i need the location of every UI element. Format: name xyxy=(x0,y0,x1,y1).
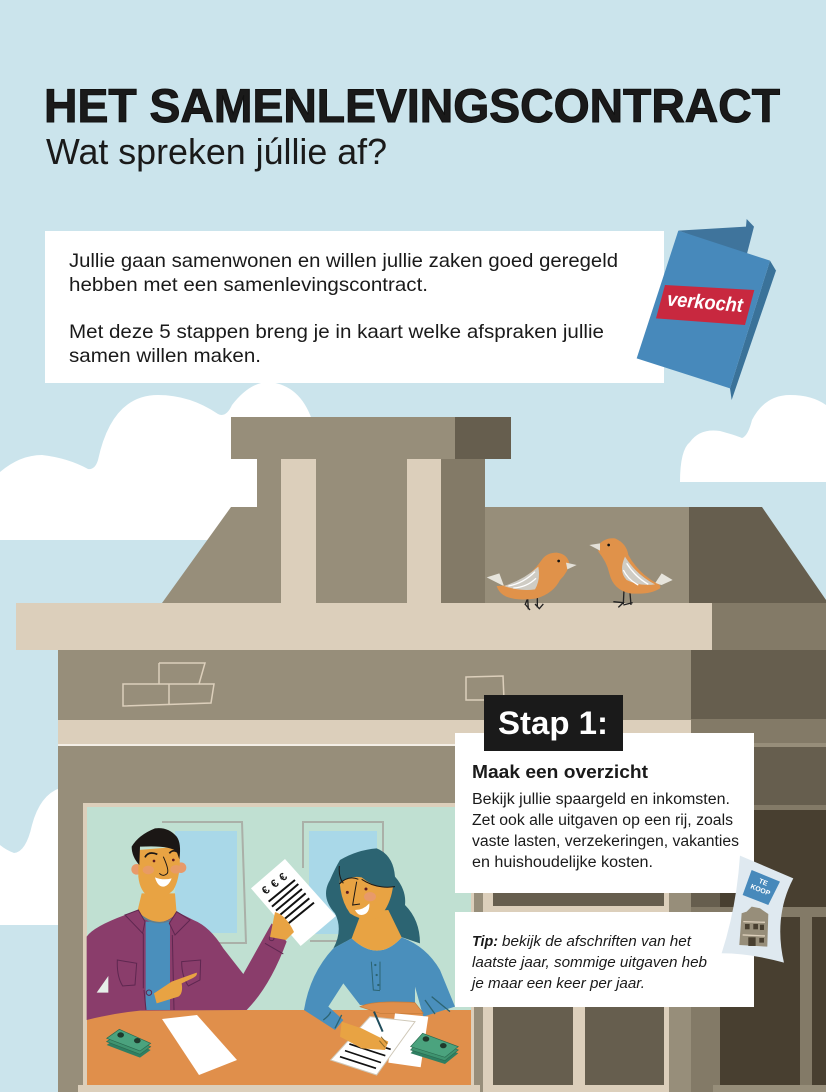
money stack right xyxy=(411,1033,458,1064)
man's raised hand xyxy=(270,912,294,940)
icon: blue contract booklet "verkocht": verkocht xyxy=(666,289,745,317)
bird: right xyxy=(589,538,673,607)
bird: left xyxy=(487,553,577,610)
cloud: large left xyxy=(0,382,330,540)
house xyxy=(16,417,826,1092)
chimney xyxy=(231,417,511,603)
room windows xyxy=(162,822,383,943)
left sheet of paper xyxy=(162,1015,237,1075)
icon: blue contract booklet "verkocht" xyxy=(637,219,776,400)
table xyxy=(87,1010,471,1085)
step heading: Maak een overzicht xyxy=(472,762,648,782)
document with euro signs xyxy=(251,859,336,946)
cloud: lower left xyxy=(0,788,60,925)
window sill xyxy=(78,1085,480,1092)
tip text: bekijk de afschriften van het xyxy=(502,933,692,950)
intro text: Jullie gaan samenwonen en willen jullie zaken goed geregeld xyxy=(69,250,618,272)
intro text: samen willen maken. xyxy=(69,345,261,367)
man xyxy=(87,828,287,1020)
upper wall xyxy=(58,650,826,747)
tip text: je maar een keer per jaar. xyxy=(470,975,645,992)
subtitle: Wat spreken júllie af? xyxy=(46,131,387,172)
lower wall xyxy=(58,746,826,1092)
lower right windows xyxy=(474,893,669,1092)
step label xyxy=(484,695,623,751)
intro text: Met deze 5 stappen breng je in kaart welke afspraken jullie xyxy=(69,321,604,343)
step text: en huishoudelijke kosten. xyxy=(472,854,653,871)
step label: Stap 1: xyxy=(498,705,608,741)
document with euro signs: € xyxy=(277,871,291,884)
document with euro signs: € xyxy=(269,877,282,891)
document with euro signs: € xyxy=(260,884,273,897)
tip text: laatste jaar, sommige uitgaven heb xyxy=(472,954,707,971)
step text: vaste lasten, verzekeringen, vakanties xyxy=(472,833,739,850)
icon: for sale flyer: TE xyxy=(758,878,769,888)
intro text xyxy=(69,250,618,367)
panel: tip xyxy=(455,912,754,1007)
money stack left xyxy=(107,1029,151,1058)
woman xyxy=(304,848,455,1075)
title: HET SAMENLEVINGSCONTRACT xyxy=(44,79,780,132)
bricks xyxy=(123,663,504,706)
papers under woman's hand xyxy=(331,1012,428,1075)
icon: for sale flyer xyxy=(722,856,793,963)
cloud: right xyxy=(680,395,826,482)
panel: step 1 xyxy=(455,695,754,893)
panel: room window xyxy=(78,803,480,1092)
small house xyxy=(739,907,768,947)
tip text: Tip: xyxy=(472,933,498,950)
icon: for sale flyer: KOOP xyxy=(749,883,771,898)
step text xyxy=(472,791,739,871)
intro text: hebben met een samenlevingscontract. xyxy=(69,274,428,296)
step text: Bekijk jullie spaargeld en inkomsten. xyxy=(472,791,730,808)
roof xyxy=(162,507,826,603)
panel: introduction xyxy=(45,231,664,383)
roof ledge xyxy=(16,603,826,650)
tip text xyxy=(470,933,707,992)
step text: Zet ook alle uitgaven op een rij, zoals xyxy=(472,812,733,829)
